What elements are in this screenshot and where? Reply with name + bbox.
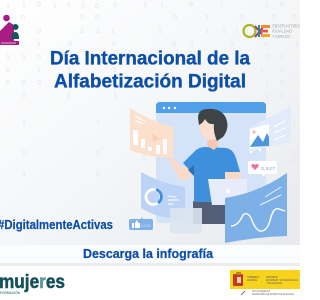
binary digits pattern: 0 — [37, 80, 41, 87]
binary digits pattern: 0 — [68, 41, 72, 48]
logo: Gobierno de España: GOBIERNO — [247, 275, 259, 279]
binary digits pattern: 1 — [113, 93, 117, 100]
download banner: Descarga la infografía — [83, 246, 214, 261]
binary digits pattern: 1 — [235, 28, 239, 35]
donut chart panel — [141, 172, 185, 219]
binary digits pattern: 1 — [22, 120, 26, 127]
binary digits pattern: 0 — [280, 67, 284, 74]
binary digits pattern: 0 — [265, 54, 269, 61]
title: Alfabetización Digital — [54, 72, 246, 92]
social likes bubble: 3,527 — [261, 166, 275, 172]
binary digits pattern: 0 — [189, 2, 193, 9]
shirt — [183, 147, 241, 202]
binary digits pattern: 1 — [158, 28, 162, 35]
binary digits pattern: 1 — [205, 14, 209, 21]
translucent card — [170, 208, 202, 234]
image gallery panel — [249, 106, 291, 153]
binary digits pattern: 1 — [292, 120, 296, 127]
logo: left organisation — [0, 15, 19, 45]
binary digits pattern: 1 — [190, 41, 194, 48]
footer white area — [0, 266, 300, 300]
binary digits pattern: 0 — [172, 41, 176, 48]
binary digits pattern: 0 — [173, 15, 177, 22]
binary digits pattern: 0 — [96, 150, 100, 157]
trousers — [193, 201, 235, 224]
binary digits pattern: 0 — [240, 14, 244, 21]
binary digits pattern: 0 — [230, 41, 234, 48]
binary digits pattern: 0 — [95, 3, 99, 10]
binary digits pattern: 1 — [222, 28, 226, 35]
logo: Gobierno de España — [230, 270, 300, 296]
face — [200, 118, 221, 140]
logo: Gobierno de España: DE ESPAÑA — [247, 277, 257, 282]
logo: Observatorio Igualdad y Empleo — [244, 24, 301, 39]
logo: Gobierno de España: POR LOS DERECHOS — [252, 289, 270, 293]
binary digits pattern: 1 — [113, 2, 117, 9]
logo: mujeres: mujeres — [0, 272, 65, 293]
binary digits pattern: 1 — [37, 41, 41, 48]
binary digits pattern: 0 — [280, 2, 284, 9]
binary digits pattern: 1 — [37, 67, 41, 74]
binary digits pattern: 0 — [112, 41, 116, 48]
binary digits pattern: 1 — [265, 93, 269, 100]
download banner — [0, 245, 300, 266]
person — [168, 109, 241, 224]
binary digits pattern: 1 — [22, 2, 26, 9]
logo: Gobierno de España: Y DE IGUALDAD — [266, 281, 283, 285]
binary digits pattern: 0 — [6, 80, 10, 87]
binary digits pattern: 1 — [96, 120, 100, 127]
background panel — [0, 0, 300, 246]
title: Día Internacional de la — [50, 48, 250, 70]
binary digits pattern: 1 — [22, 171, 26, 178]
binary digits pattern: 0 — [272, 14, 276, 21]
illustration: digital worker with floating screens — [129, 102, 291, 243]
binary digits pattern: 0 — [22, 93, 26, 100]
binary digits pattern: 0 — [95, 14, 99, 21]
binary digits pattern: 0 — [21, 15, 25, 22]
hair — [198, 109, 227, 141]
like badge: 2455 — [140, 223, 151, 228]
binary digits pattern: 1 — [113, 67, 117, 74]
binary digits pattern: 0 — [292, 157, 296, 164]
binary digits pattern: 1 — [22, 54, 26, 61]
binary digits pattern: 0 — [37, 2, 41, 9]
laptop — [208, 179, 247, 205]
binary digits pattern: 1 — [265, 2, 269, 9]
binary digits pattern: 1 — [67, 67, 71, 74]
binary digits pattern: 1 — [6, 54, 10, 61]
binary digits pattern: 1 — [265, 80, 269, 87]
binary digits pattern: 0 — [37, 54, 41, 61]
neck — [207, 134, 218, 150]
binary digits pattern: 0 — [292, 14, 296, 21]
binary digits pattern: 1 — [80, 28, 84, 35]
binary digits pattern: 0 — [142, 155, 146, 162]
binary digits pattern: 1 — [280, 93, 284, 100]
binary digits pattern: 1 — [81, 2, 85, 9]
orange chart panel — [130, 108, 174, 158]
binary digits pattern: 1 — [205, 28, 209, 35]
social likes bubble — [248, 161, 277, 177]
binary digits pattern: 1 — [143, 2, 147, 9]
logo: Observatorio Igualdad y Empleo: IGUALDAD — [272, 29, 292, 34]
binary digits pattern: 0 — [22, 150, 26, 157]
binary digits pattern: 1 — [295, 41, 299, 48]
binary digits pattern: 1 — [67, 93, 71, 100]
binary digits pattern: 1 — [67, 2, 71, 9]
binary digits pattern: 0 — [280, 80, 284, 87]
left arm — [168, 155, 198, 180]
main browser window — [156, 102, 266, 223]
binary digits pattern: 1 — [160, 2, 164, 9]
binary digits pattern: 1 — [53, 3, 57, 10]
binary digits pattern: 1 — [220, 2, 224, 9]
line chart panel — [225, 173, 287, 243]
binary digits pattern: 0 — [37, 28, 41, 35]
binary digits pattern: 0 — [22, 80, 26, 87]
binary digits pattern: 1 — [292, 150, 296, 157]
binary digits pattern: 1 — [260, 67, 264, 74]
like badge — [129, 217, 153, 230]
binary digits pattern: 0 — [6, 67, 10, 74]
binary digits pattern — [6, 2, 299, 178]
logo: mujeres: FORMACIÓN — [0, 290, 20, 295]
binary digits pattern: 1 — [96, 28, 100, 35]
binary digits pattern: 1 — [6, 3, 10, 10]
binary digits pattern: 1 — [280, 54, 284, 61]
binary digits pattern: 0 — [96, 171, 100, 178]
logo: Observatorio Igualdad y Empleo: Y EMPLEO — [272, 34, 291, 39]
binary digits pattern: 1 — [111, 28, 115, 35]
binary digits pattern: 0 — [80, 14, 84, 21]
forearm — [225, 172, 241, 181]
logo: Gobierno de España: MINISTERIO — [266, 275, 278, 279]
binary digits pattern: 0 — [264, 41, 268, 48]
title — [50, 48, 250, 92]
hashtag: #DigitalmenteActivas — [0, 217, 113, 232]
